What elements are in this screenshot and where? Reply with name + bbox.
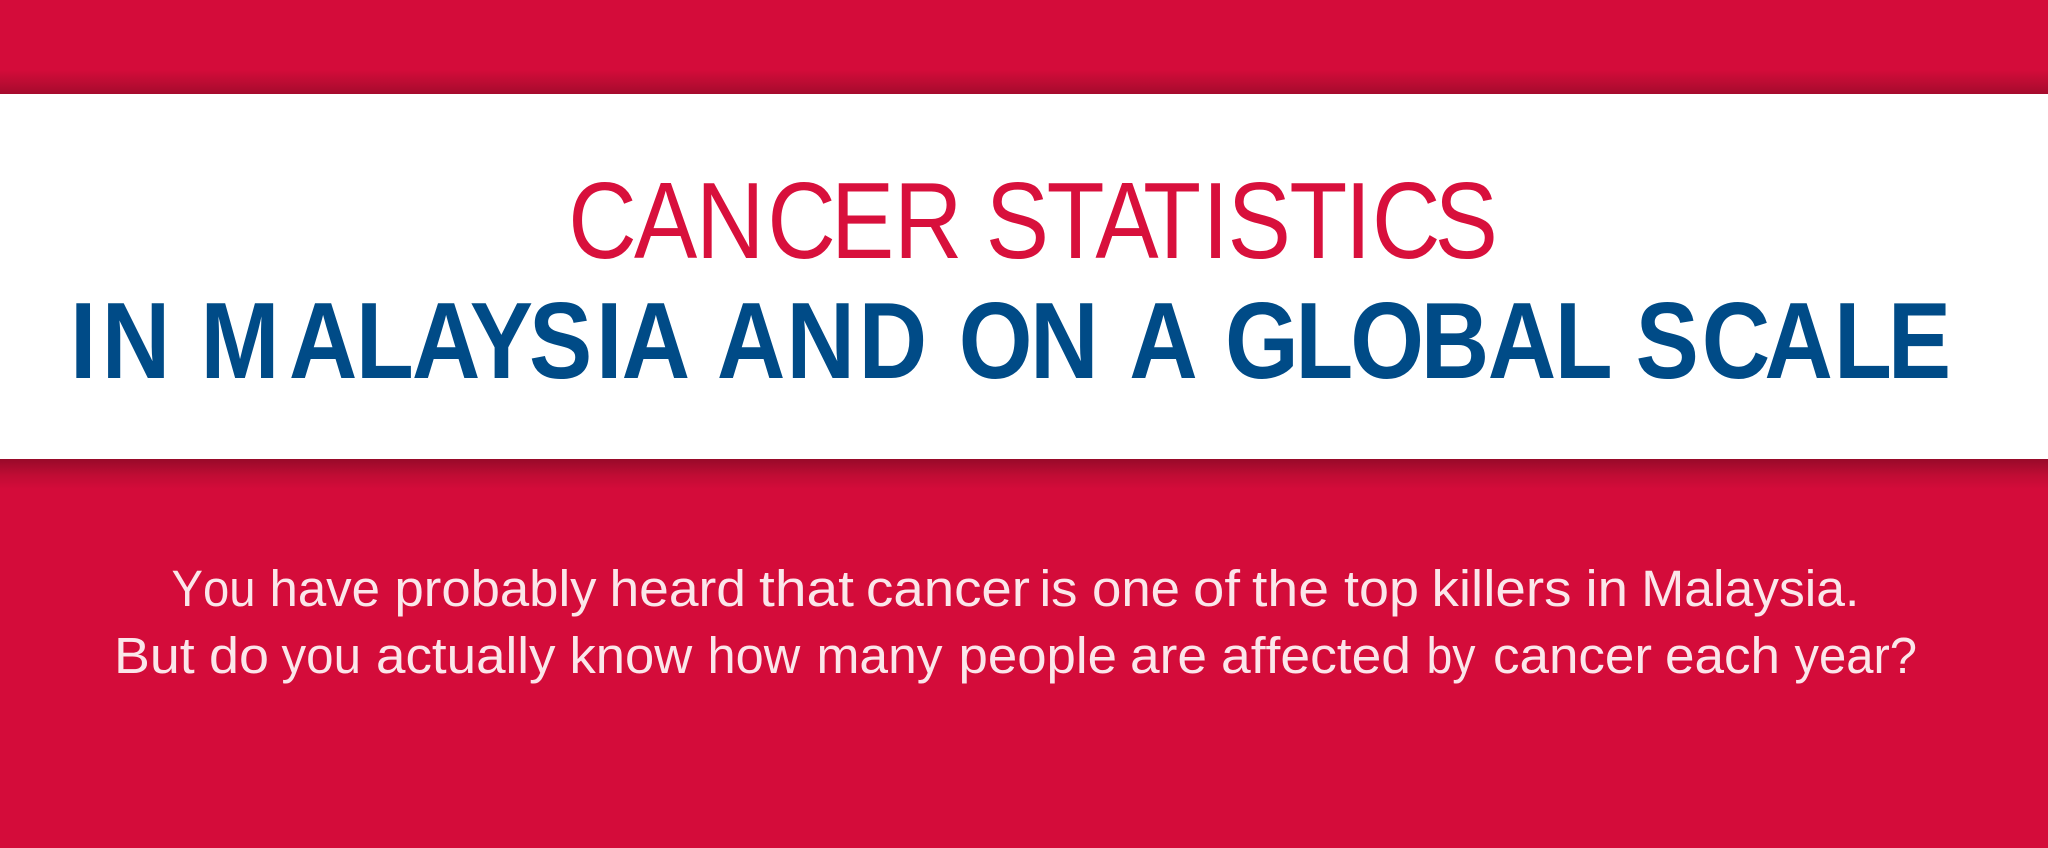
intro line 2: people bbox=[958, 627, 1117, 684]
intro line 2: are bbox=[1130, 627, 1207, 684]
intro line 2 bbox=[114, 627, 1917, 684]
title line 1: CANCER STATISTICS bbox=[568, 160, 1498, 281]
intro line 2: affected bbox=[1221, 627, 1411, 684]
intro text bbox=[114, 560, 1917, 684]
intro line 2: But bbox=[114, 627, 195, 684]
intro line 1: probably bbox=[394, 560, 597, 617]
intro line 1: heard bbox=[610, 560, 746, 617]
intro line 1 bbox=[172, 560, 1859, 617]
title line 2: IN MALAYSIA AND ON A GLOBAL SCALE bbox=[70, 280, 1951, 401]
intro line 1: have bbox=[270, 560, 380, 617]
intro line 1: that bbox=[759, 560, 854, 617]
intro line 1: Malaysia. bbox=[1641, 560, 1859, 617]
intro line 2: you bbox=[282, 627, 361, 684]
intro line 2: many bbox=[816, 627, 943, 684]
shadow above white band bbox=[0, 70, 2048, 94]
intro line 1: top bbox=[1344, 560, 1419, 617]
intro line 2: know bbox=[570, 627, 692, 684]
intro line 1: of bbox=[1193, 560, 1241, 617]
intro line 2: how bbox=[708, 627, 800, 684]
intro line 1: cancer bbox=[866, 560, 1030, 617]
intro line 2: actually bbox=[376, 627, 556, 684]
intro line 2: each bbox=[1665, 627, 1780, 684]
intro line 1: in bbox=[1586, 560, 1628, 617]
intro line 1: You bbox=[172, 560, 256, 617]
title band bbox=[0, 94, 2048, 459]
intro line 2: by bbox=[1426, 627, 1476, 684]
white band background bbox=[0, 94, 2048, 459]
intro line 2: year? bbox=[1794, 627, 1917, 684]
intro line 1: the bbox=[1252, 560, 1329, 617]
intro line 1: is bbox=[1040, 560, 1078, 617]
intro line 2: do bbox=[209, 627, 269, 684]
shadow below white band bbox=[0, 459, 2048, 489]
intro line 2: cancer bbox=[1493, 627, 1652, 684]
intro line 1: killers bbox=[1432, 560, 1572, 617]
intro line 1: one bbox=[1092, 560, 1180, 617]
